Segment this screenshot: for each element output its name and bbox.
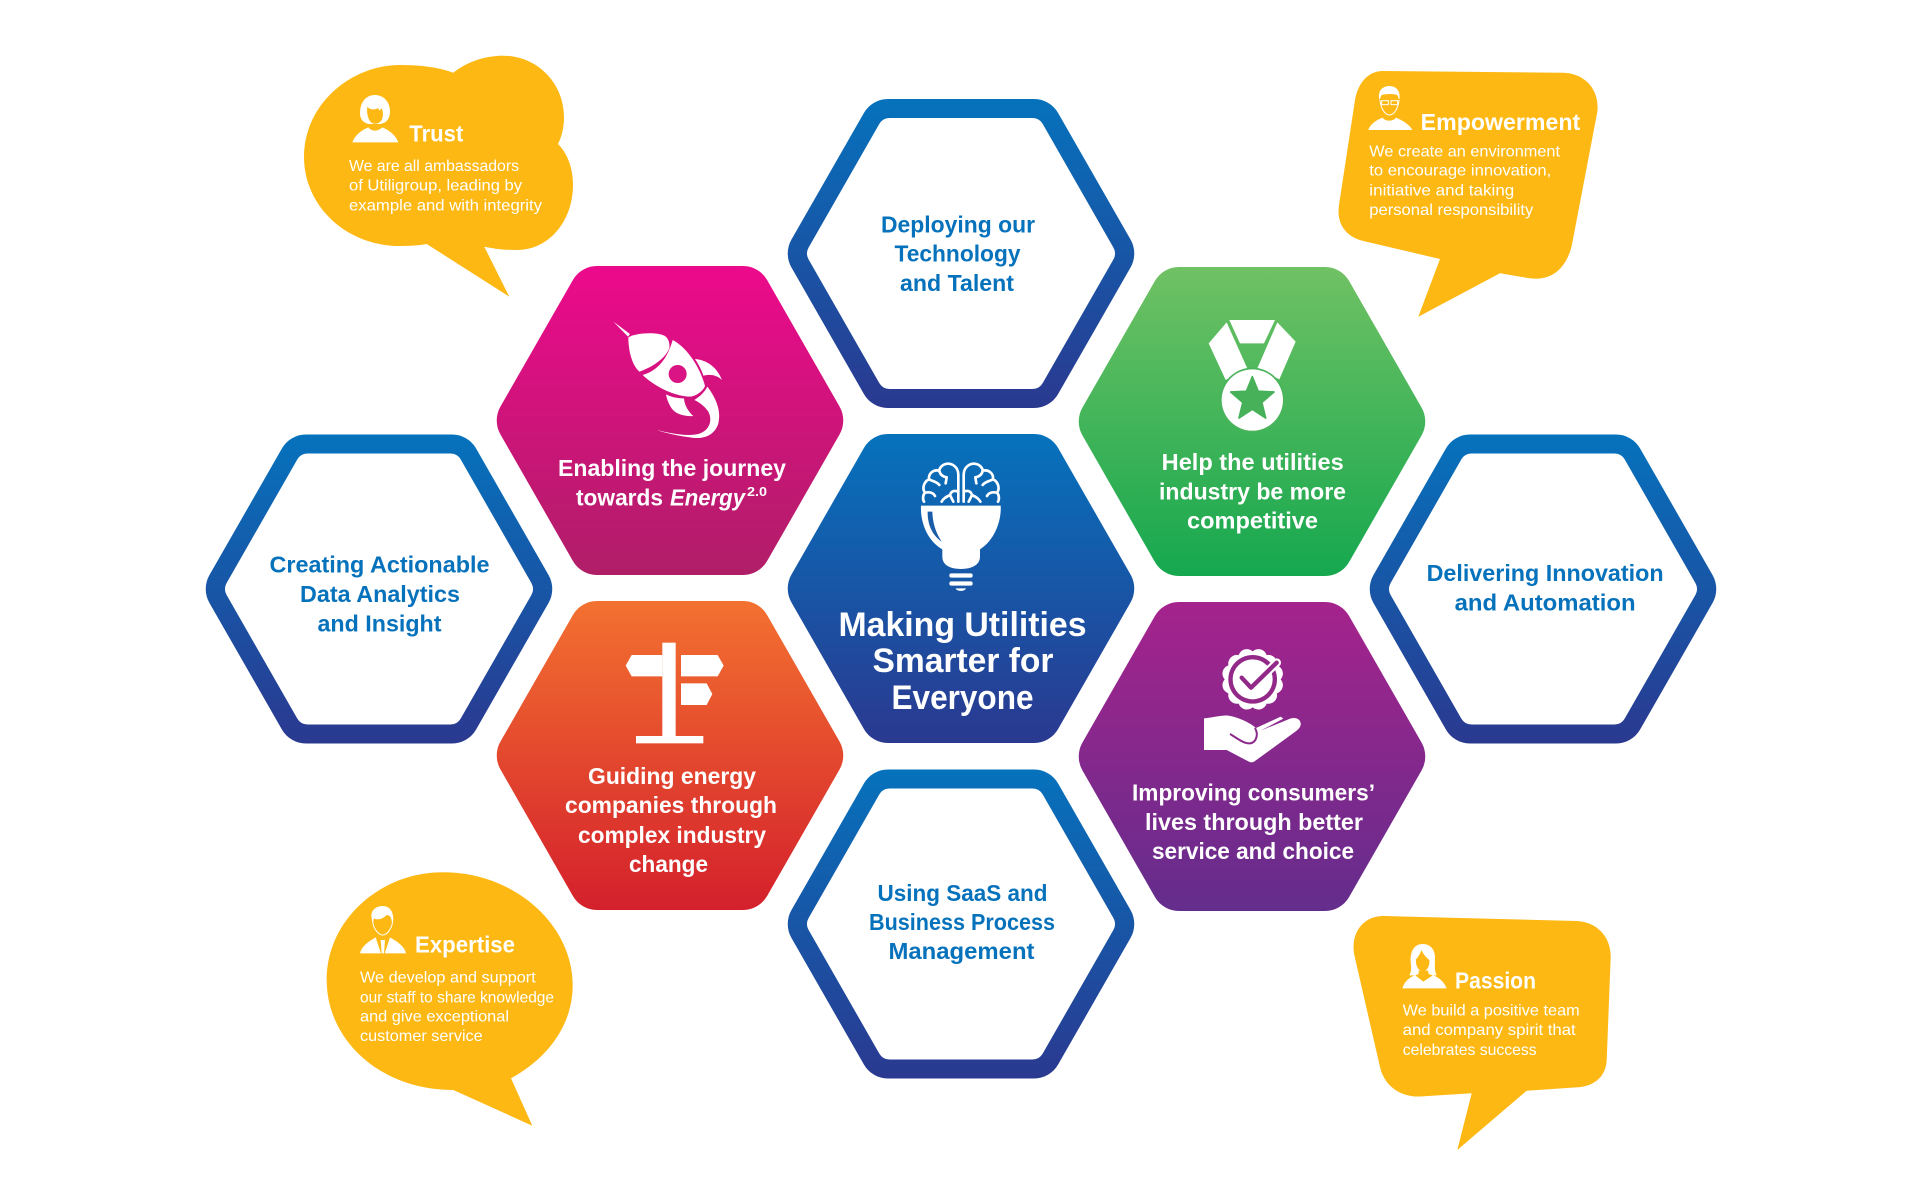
text: enabling the journey towards energy 2.0: towards: [576, 485, 663, 511]
callout: trust: [304, 56, 573, 297]
text: help the utilities industry: [1159, 449, 1346, 534]
text: guiding energy companies: change: [629, 851, 708, 877]
text: passion title: Passion: [1455, 967, 1536, 993]
text: expertise body: We develop and support: [360, 970, 536, 987]
text: help the utilities industry: Help the utilities: [1162, 449, 1344, 475]
text: creating actionable data analytics: [270, 552, 490, 636]
text: expertise body: customer service: [360, 1028, 483, 1045]
text: creating actionable data analytics: Data Analytics: [300, 581, 460, 607]
icon: woman with long hair: [1402, 944, 1447, 988]
title: making utilities smarter for everyone: Smarter for: [872, 642, 1054, 680]
text: improving consumers lives: [1132, 780, 1375, 864]
panel: bottom outline hexagon: [788, 769, 1134, 1078]
text: deploying technology and talent: Deploying our: [881, 212, 1035, 238]
text: guiding energy companies: complex industry: [578, 822, 766, 848]
text: creating actionable data analytics: Creating Actionable: [270, 552, 490, 578]
text: passion body: and company spirit that: [1403, 1022, 1576, 1039]
callout: empowerment: [1339, 71, 1598, 317]
text: delivering innovation and automation: and Automation: [1455, 590, 1636, 616]
text: empowerment title: Empowerment: [1421, 109, 1581, 135]
text: expertise body: our staff to share knowledge: [360, 989, 554, 1006]
icon: rocket: [613, 322, 722, 438]
callout: expertise: [327, 872, 573, 1126]
title: making utilities smarter for everyone: Everyone: [892, 679, 1034, 717]
text: deploying technology and talent: and Talent: [900, 270, 1014, 296]
panel: pink hexagon: [497, 266, 843, 575]
text: trust title: Trust: [409, 121, 464, 147]
text: empowerment body: We create an environment: [1369, 144, 1561, 161]
panel: right outline hexagon: [1370, 434, 1716, 744]
title: making utilities smarter for everyone: Making Utilities: [838, 606, 1086, 644]
text: passion body: We build a positive team: [1403, 1003, 1580, 1020]
callout: passion: [1354, 916, 1611, 1150]
text: saas and business process management: Management: [888, 938, 1035, 964]
text: saas and business process management: Business Process: [869, 909, 1055, 935]
text: delivering innovation and automation: [1427, 560, 1664, 616]
panel: purple hexagon: [1079, 602, 1425, 911]
icon: man with glasses: [1368, 86, 1412, 130]
text: enabling the journey towards energy 2.0: 2.0: [747, 484, 767, 499]
text: trust body: We are all ambassadors: [349, 158, 519, 175]
text: passion body: celebrates success: [1403, 1042, 1537, 1059]
text: expertise body: [360, 970, 554, 1045]
panel: orange hexagon: [497, 601, 843, 910]
text: trust body: example and with integrity: [349, 197, 542, 214]
text: enabling the journey towards energy 2.0: Energy: [670, 485, 747, 511]
text: enabling the journey towards energy 2.0: [558, 455, 786, 511]
text: saas and business process management: Using SaaS and: [878, 880, 1048, 906]
text: trust body: [349, 158, 542, 214]
text: expertise body: and give exceptional: [360, 1009, 509, 1026]
text: improving consumers lives: Improving consumers’: [1132, 780, 1375, 806]
icon: woman with bob hair: [352, 95, 398, 142]
panel: green hexagon: [1079, 267, 1425, 576]
text: empowerment body: to encourage innovation,: [1369, 163, 1551, 180]
text: help the utilities industry: competitive: [1187, 508, 1318, 534]
text: enabling the journey towards energy 2.0: Enabling the journey: [558, 455, 786, 481]
text: empowerment body: [1369, 144, 1561, 219]
icon: man with tie: [360, 906, 406, 953]
text: saas and business process management: [869, 880, 1055, 964]
icon: signpost: [626, 643, 724, 743]
text: deploying technology and talent: [881, 212, 1035, 296]
text: passion body: [1403, 1003, 1580, 1059]
text: creating actionable data analytics: and Insight: [318, 610, 442, 636]
text: empowerment body: personal responsibility: [1369, 202, 1533, 219]
panel: central blue hexagon: [788, 434, 1134, 743]
text: improving consumers lives: service and choice: [1152, 838, 1354, 864]
title: making utilities smarter for everyone: [838, 606, 1086, 717]
icon: brain light bulb: [921, 464, 1001, 591]
panel: left outline hexagon: [206, 434, 552, 744]
text: improving consumers lives: lives through better: [1145, 809, 1363, 835]
icon: hand holding check badge: [1204, 649, 1301, 762]
panel: top outline hexagon: [788, 99, 1134, 408]
text: guiding energy companies: companies through: [565, 792, 777, 818]
text: deploying technology and talent: Technology: [894, 241, 1020, 267]
text: help the utilities industry: industry be more: [1159, 479, 1346, 505]
text: empowerment body: initiative and taking: [1369, 183, 1514, 200]
text: delivering innovation and automation: Delivering Innovation: [1427, 560, 1664, 586]
icon: medal: [1209, 320, 1296, 432]
text: guiding energy companies: Guiding energy: [588, 763, 756, 789]
text: expertise title: Expertise: [415, 932, 515, 958]
text: trust body: of Utiligroup, leading by: [349, 178, 522, 195]
text: guiding energy companies: [565, 763, 777, 877]
